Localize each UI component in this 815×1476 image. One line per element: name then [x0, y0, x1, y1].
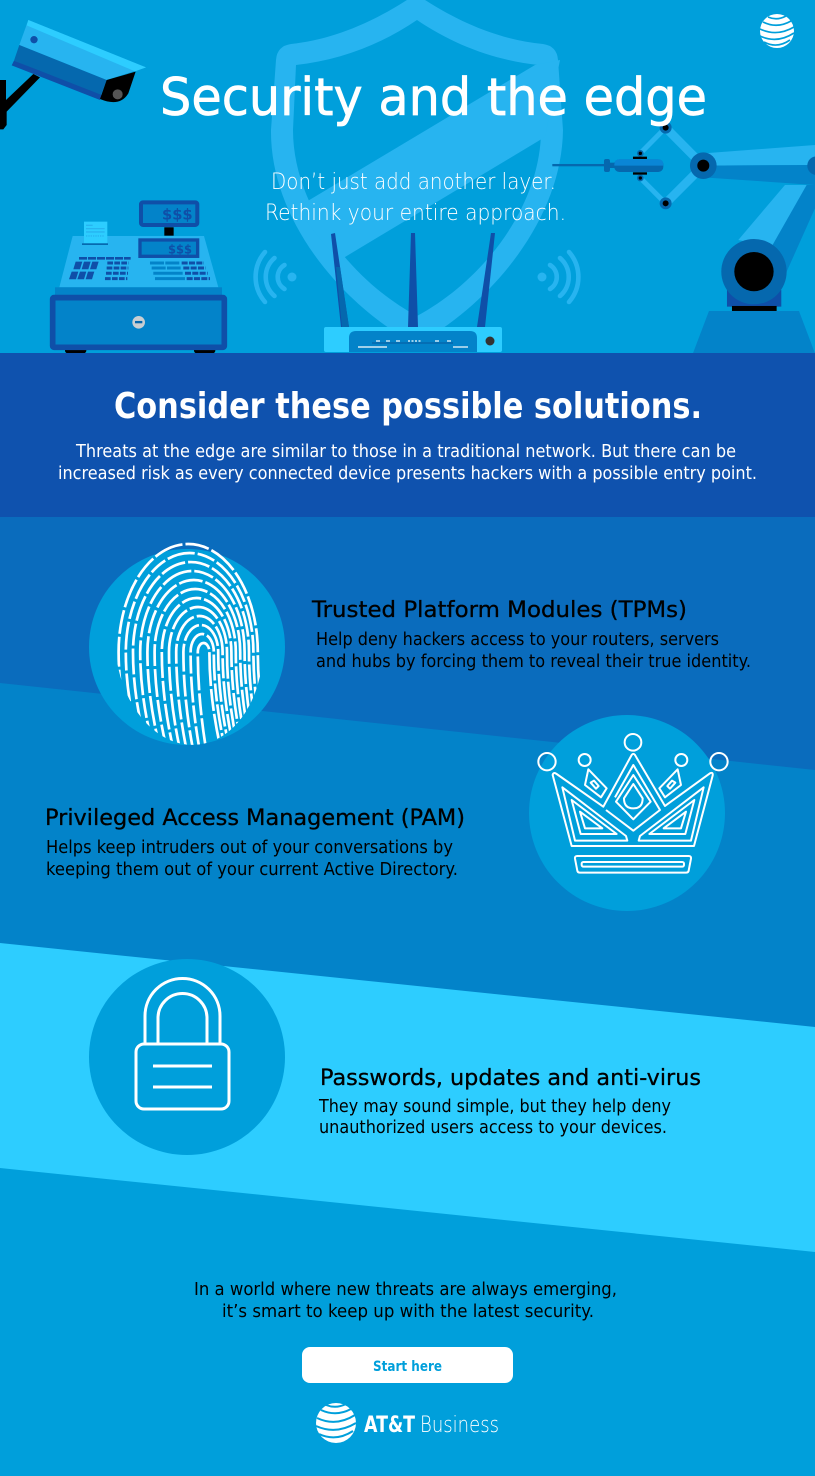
icon: shield background [271, 0, 563, 345]
intro text: Threats at the edge are similar to those in a traditional network. But there can be [75, 442, 736, 462]
icon: wifi router [324, 233, 502, 352]
heading: PAM: Privileged Access Management (PAM) [45, 805, 465, 831]
icon: security camera [0, 20, 146, 129]
closing text: In a world where new threats are always emerging, [194, 1280, 617, 1300]
button: start here [302, 1347, 513, 1383]
icon: padlock [89, 959, 285, 1155]
title: Security and the edge [160, 68, 707, 128]
panel: privileged access management [45, 715, 728, 911]
heading: Consider these possible solutions. [114, 386, 702, 427]
logo: AT&T Business: AT&T [364, 1413, 415, 1438]
heading: TPMs: Trusted Platform Modules (TPMs) [311, 597, 687, 623]
text: TPMs description: and hubs by forcing them to reveal their true identity. [316, 652, 751, 672]
text: passwords description [318, 1097, 671, 1138]
heading: passwords: Passwords, updates and anti-virus [320, 1065, 701, 1091]
panel: passwords, updates and anti-virus [89, 959, 701, 1155]
text: PAM description: keeping them out of your current Active Directory. [46, 860, 458, 880]
icon: cash register: $$$ [168, 241, 192, 256]
button: start here: Start here [373, 1359, 442, 1375]
icon: cash register: $$$ [162, 206, 193, 223]
panel: hero [0, 0, 815, 353]
icon: fingerprint [89, 544, 285, 752]
closing text: it’s smart to keep up with the latest security. [222, 1302, 594, 1322]
subtitle [265, 170, 566, 226]
text: TPMs description [316, 630, 751, 672]
panel: solutions header [0, 353, 815, 517]
text: PAM description: Helps keep intruders out of your conversations by [46, 838, 453, 858]
icon: robot arm with screwdriver [552, 122, 815, 353]
text: passwords description: unauthorized users access to your devices. [319, 1118, 667, 1138]
text: PAM description [46, 838, 458, 880]
subtitle: Rethink your entire approach. [265, 201, 566, 226]
subtitle: Don’t just add another layer. [271, 170, 556, 195]
logo: AT&T Business: Business [420, 1413, 499, 1438]
text: passwords description: They may sound simple, but they help deny [318, 1097, 671, 1117]
panel: trusted platform modules [89, 544, 751, 752]
icon: AT&T globe [760, 14, 794, 48]
panel: diagonal bands [0, 517, 815, 1252]
icon: crown [529, 715, 728, 911]
text: TPMs description: Help deny hackers access to your routers, servers [316, 630, 719, 650]
icon: left wifi waves [256, 252, 296, 302]
intro text [58, 442, 757, 484]
intro text: increased risk as every connected device presents hackers with a possible entry point. [58, 464, 757, 484]
closing text [194, 1280, 617, 1322]
logo: AT&T Business [316, 1403, 499, 1443]
icon: right wifi waves [538, 252, 578, 302]
icon: cash register [53, 202, 224, 353]
